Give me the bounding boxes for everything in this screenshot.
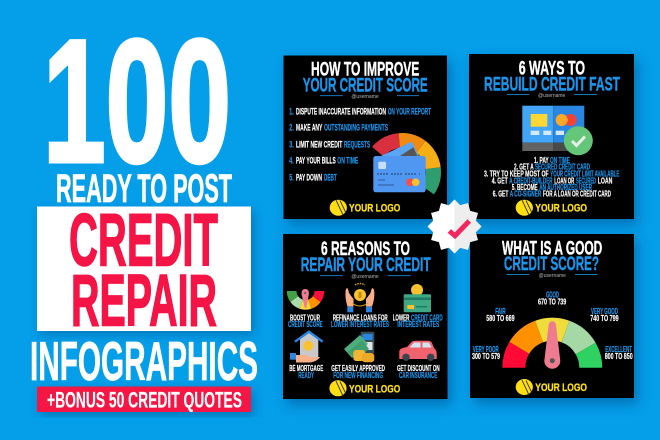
logo: YOUR LOGO	[349, 383, 400, 395]
heading: REPAIR YOUR CREDIT	[301, 254, 431, 276]
label: very good: 740 TO 799	[590, 313, 619, 323]
label: lower credit card rates: LOWER	[393, 312, 409, 322]
label: excellent: EXCELLENT	[605, 344, 632, 354]
label: very good	[590, 306, 619, 323]
list of tips: 1. PAY	[534, 155, 549, 165]
label: easily approved: GET EASILY APPROVED	[331, 363, 385, 373]
logo	[329, 380, 400, 396]
label: fair	[486, 306, 515, 323]
list of tips: LOAN OR	[554, 175, 574, 185]
big number 100: 100	[43, 4, 231, 200]
heading	[301, 238, 431, 276]
heading: 6 WAYS TO	[519, 57, 585, 79]
list of tips: LIMIT NEW CREDIT	[296, 138, 342, 149]
heading	[502, 237, 602, 275]
label: fair: FAIR	[495, 306, 506, 316]
title: infographics: INFOGRAPHICS	[30, 330, 258, 392]
heading: 6 REASONS TO	[321, 238, 410, 260]
username: @username	[351, 274, 379, 280]
label: very poor: VERY POOR	[473, 344, 499, 354]
username: @username	[538, 93, 566, 99]
label: lower credit card rates: INTEREST RATES	[397, 319, 440, 329]
subtitle: ready to post: READY TO POST	[56, 167, 232, 211]
label: car insurance discount: CAR INSURANCE	[399, 370, 438, 380]
label: refinance loans: LOWER INTEREST RATES	[331, 319, 389, 329]
label: be mortgage ready: BE MORTGAGE	[289, 363, 324, 373]
list of tips: PAY YOUR BILLS	[296, 155, 336, 166]
list of tips: SECURED	[576, 175, 596, 185]
label: car insurance discount	[397, 363, 440, 380]
list of tips: 6. GET	[493, 189, 509, 199]
list of tips: SECURED CREDIT CARD	[535, 162, 590, 172]
logo: YOUR LOGO	[535, 382, 587, 394]
heading	[303, 59, 428, 97]
label: boost your credit score	[288, 312, 323, 329]
username: @username	[539, 273, 566, 279]
list of tips: 5.	[289, 171, 294, 182]
icon: card and coin	[404, 284, 431, 312]
list of tips: DISPUTE INACCURATE INFORMATION	[296, 105, 386, 116]
title: credit: CREDIT	[69, 198, 218, 282]
label: easily approved	[331, 363, 385, 380]
list of tips: 2. GET A	[514, 162, 534, 172]
label: be mortgage ready: READY	[298, 370, 314, 380]
list of tips: 2.	[289, 122, 294, 133]
logo	[330, 200, 400, 216]
label: good	[538, 289, 567, 306]
label: very poor: 300 TO 579	[472, 351, 500, 361]
logo	[516, 200, 587, 216]
list of tips: PAY DOWN	[296, 171, 322, 182]
list of tips	[484, 155, 620, 199]
list of tips: ON YOUR REPORT	[388, 105, 431, 116]
label: good: 670 TO 739	[538, 296, 567, 306]
list of tips: 5. BECOME	[512, 182, 538, 192]
label: be mortgage ready	[289, 363, 324, 380]
panel: how to improve your credit score	[284, 56, 447, 219]
white title box	[37, 198, 251, 342]
white title box: REPAIR	[71, 260, 217, 342]
label: very poor	[472, 344, 500, 361]
gauge chart	[502, 318, 602, 368]
label: refinance loans	[331, 312, 389, 329]
logo: YOUR LOGO	[535, 203, 587, 215]
panel: 6 reasons to repair your credit	[283, 234, 448, 399]
logo	[516, 379, 587, 395]
panel: 6 ways to rebuild credit fast	[469, 54, 634, 219]
logo: YOUR LOGO	[349, 203, 400, 215]
list of tips: ON TIME	[337, 155, 358, 166]
heading: YOUR CREDIT SCORE	[303, 75, 428, 97]
list of tips: 4.	[289, 155, 294, 166]
label: easily approved: FOR NEW FINANCING	[333, 370, 383, 380]
heading	[484, 57, 620, 96]
icon: credit card with check	[522, 106, 593, 155]
icon: money, calculator and coins	[344, 332, 374, 362]
list of tips: LOAN	[598, 175, 612, 185]
icon: car	[399, 341, 437, 361]
icon: house in hand	[290, 332, 323, 363]
label: good: GOOD	[546, 289, 559, 299]
list of tips: ON TIME	[550, 155, 570, 165]
label: lower credit card rates	[393, 312, 443, 329]
heading: HOW TO IMPROVE	[311, 59, 419, 81]
label: excellent	[605, 344, 633, 361]
list of tips: MAKE ANY	[296, 122, 323, 133]
list of tips: AN AUTHORIZED USER	[539, 182, 592, 192]
username: @username	[351, 94, 379, 100]
label: lower credit card rates: CREDIT CARD	[411, 312, 443, 322]
panel: what is a good credit score	[470, 234, 634, 398]
list of tips: REQUESTS	[344, 138, 370, 149]
icon: score gauge with credit cards	[372, 133, 441, 194]
gauge needle	[544, 321, 560, 369]
list of tips: 1.	[289, 105, 294, 116]
icon: gauge	[287, 289, 324, 310]
label: fair: 580 TO 669	[486, 313, 515, 323]
list of tips: OUTSTANDING PAYMENTS	[324, 122, 388, 133]
bonus banner	[37, 386, 251, 412]
list of tips: DEBT	[324, 171, 337, 182]
bonus banner: +BONUS 50 CREDIT QUOTES	[47, 388, 242, 412]
label: boost your credit score: CREDIT SCORE	[288, 319, 323, 329]
list of tips: 4. GET	[492, 175, 508, 185]
icon: hands holding coin	[345, 284, 374, 312]
list of tips: A CO-SIGNER	[510, 189, 541, 199]
label: boost your credit score: BOOST YOUR	[290, 312, 320, 322]
list of tips: 3. TRY TO KEEP MOST OF	[484, 168, 549, 178]
label: car insurance discount: GET DISCOUNT ON	[397, 363, 440, 373]
list of tips: A CREDIT-BUILDER	[509, 175, 553, 185]
icon: check badge	[428, 200, 482, 254]
label: excellent: 800 TO 850	[605, 351, 633, 361]
list of tips	[289, 105, 431, 182]
list of tips: 3.	[289, 138, 294, 149]
label: very good: VERY GOOD	[591, 306, 618, 316]
label: refinance loans: REFINANCE LOANS FOR	[333, 312, 388, 322]
